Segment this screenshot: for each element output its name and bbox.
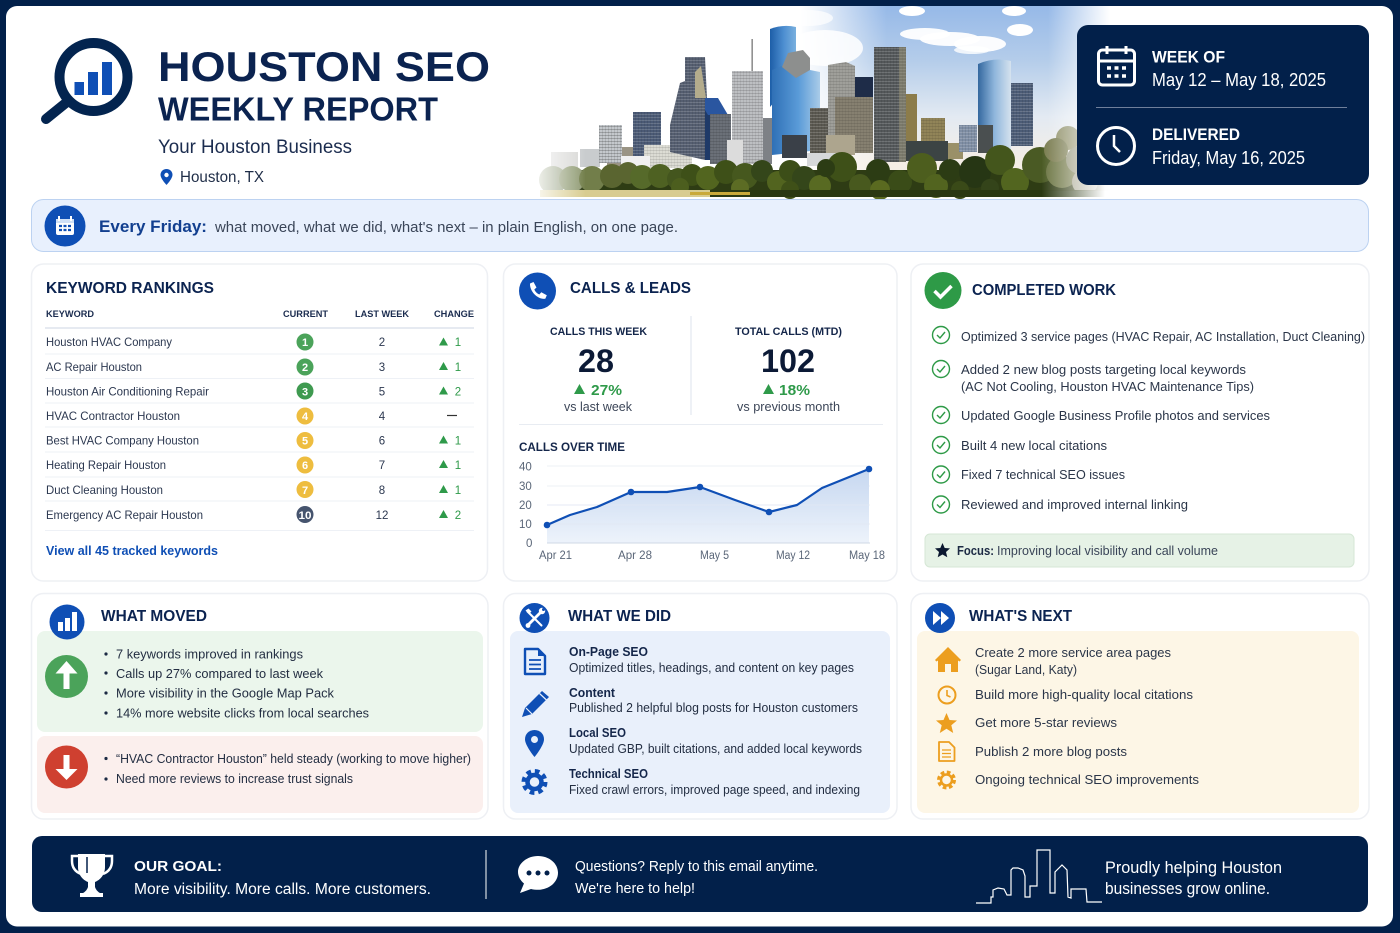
item: blog posts: Publish 2 more blog posts bbox=[975, 744, 1127, 759]
icon: down arrow bbox=[45, 746, 88, 788]
item: content bbox=[522, 686, 858, 717]
yellow block bbox=[917, 631, 1359, 813]
item: technical seo bbox=[524, 767, 860, 797]
stat: total calls: vs previous month bbox=[737, 400, 840, 414]
icon: phone bbox=[519, 272, 556, 310]
contact text: We're here to help! bbox=[575, 881, 695, 897]
icon: up arrow bbox=[45, 655, 88, 698]
callout: focus: Focus: bbox=[957, 544, 994, 558]
line chart: calls over time: 20 bbox=[519, 500, 532, 512]
stat: calls this week: 27% bbox=[591, 382, 622, 399]
stat: calls this week: CALLS THIS WEEK bbox=[550, 326, 647, 338]
icon: green check badge bbox=[924, 272, 962, 309]
row 6: 6 bbox=[302, 460, 308, 472]
row 1: 1 bbox=[302, 337, 308, 349]
list: improvements: 14% more website clicks from local searches bbox=[116, 706, 369, 720]
date card bbox=[1077, 25, 1369, 185]
title bbox=[158, 43, 490, 128]
row 5: 6 bbox=[379, 436, 385, 448]
row 7: 1 bbox=[455, 485, 461, 497]
item: reviews bbox=[936, 713, 1118, 733]
item: service pages: (Sugar Land, Katy) bbox=[975, 662, 1077, 677]
row 8: 12 bbox=[376, 510, 388, 522]
stat: total calls: 102 bbox=[761, 343, 815, 379]
row 8: Emergency AC Repair Houston bbox=[46, 508, 203, 522]
row 7 bbox=[46, 481, 461, 498]
line chart: calls over time: May 5 bbox=[700, 550, 729, 562]
row 6: 7 bbox=[379, 460, 385, 472]
location: Houston, TX bbox=[180, 169, 265, 186]
heading: KEYWORD RANKINGS bbox=[46, 280, 214, 297]
footer band bbox=[32, 836, 1368, 912]
task list: Added 2 new blog posts targeting local keywords bbox=[961, 362, 1246, 377]
item: local seo: Updated GBP, built citations, and added local keywords bbox=[569, 742, 862, 756]
row 1 bbox=[46, 334, 461, 350]
chart title: CALLS OVER TIME bbox=[519, 442, 625, 454]
list: watch items: Need more reviews to increase trust signals bbox=[116, 772, 353, 786]
line chart: calls over time: 0 bbox=[526, 538, 532, 550]
row 6 bbox=[46, 456, 461, 474]
item: content: Content bbox=[569, 686, 616, 700]
list: improvements bbox=[104, 648, 369, 720]
goal text: OUR GOAL: bbox=[134, 859, 222, 875]
trees bbox=[539, 126, 1105, 200]
icon: magnifier logo bbox=[46, 43, 128, 119]
row 5: Best HVAC Company Houston bbox=[46, 434, 199, 448]
tagline: businesses grow online. bbox=[1105, 880, 1270, 898]
task list: Reviewed and improved internal linking bbox=[961, 497, 1188, 512]
green block bbox=[37, 631, 483, 732]
row 5: 1 bbox=[455, 436, 461, 448]
task list: Updated Google Business Profile photos and services bbox=[961, 408, 1270, 423]
row 6: Heating Repair Houston bbox=[46, 458, 166, 472]
row 2: 1 bbox=[455, 362, 461, 374]
line chart: calls over time: 40 bbox=[519, 462, 532, 474]
line chart: calls over time: Apr 21 bbox=[539, 550, 572, 562]
row 2: AC Repair Houston bbox=[46, 360, 142, 374]
stat: calls this week bbox=[550, 326, 647, 414]
line chart: calls over time bbox=[519, 462, 885, 562]
business name: Your Houston Business bbox=[158, 136, 352, 158]
row 4 bbox=[46, 408, 457, 424]
goal text bbox=[134, 859, 431, 898]
list: improvements: More visibility in the Google Map Pack bbox=[116, 686, 335, 700]
row 3: 5 bbox=[379, 386, 385, 398]
stat: calls this week: vs last week bbox=[564, 400, 633, 414]
row 1: Houston HVAC Company bbox=[46, 335, 172, 349]
row 2: 3 bbox=[379, 362, 385, 374]
task list: Built 4 new local citations bbox=[961, 438, 1107, 453]
table header bbox=[46, 309, 474, 320]
item: on-page seo: Optimized titles, headings, and content on key pages bbox=[569, 661, 854, 675]
list: improvements: Calls up 27% compared to last week bbox=[116, 667, 324, 681]
title: WEEKLY REPORT bbox=[158, 92, 439, 128]
row 4: HVAC Contractor Houston bbox=[46, 409, 180, 423]
row 3 bbox=[46, 382, 461, 400]
item: citations: Build more high-quality local citations bbox=[975, 687, 1194, 702]
item: service pages: Create 2 more service area pages bbox=[975, 645, 1171, 660]
line chart: calls over time: 30 bbox=[519, 481, 532, 493]
item: technical seo: Technical SEO bbox=[569, 767, 648, 781]
row 4: 4 bbox=[379, 411, 386, 423]
item: local seo: Local SEO bbox=[569, 726, 626, 740]
task list: Fixed 7 technical SEO issues bbox=[961, 467, 1125, 482]
week of: May 12 – May 18, 2025 bbox=[1152, 70, 1326, 90]
list: watch items: “HVAC Contractor Houston” held steady (working to move higher) bbox=[116, 752, 471, 766]
stat: total calls: TOTAL CALLS (MTD) bbox=[735, 326, 842, 338]
goal text: More visibility. More calls. More customers. bbox=[134, 881, 431, 898]
heading: WHAT MOVED bbox=[101, 608, 207, 625]
task list: Optimized 3 service pages (HVAC Repair, AC Installation, Duct Cleaning) bbox=[961, 329, 1365, 344]
tagline bbox=[1105, 859, 1282, 898]
tagline: Proudly helping Houston bbox=[1105, 859, 1282, 877]
line chart: calls over time: 10 bbox=[519, 519, 532, 531]
banner bbox=[32, 200, 1368, 252]
callout: focus bbox=[925, 534, 1354, 567]
icon: forward badge bbox=[925, 603, 955, 633]
item: on-page seo bbox=[525, 645, 854, 675]
week of: WEEK OF bbox=[1152, 48, 1225, 66]
delivered: Friday, May 16, 2025 bbox=[1152, 148, 1305, 168]
banner text: what moved, what we did, what's next – in plain English, on one page. bbox=[214, 219, 678, 236]
item: reviews: Get more 5-star reviews bbox=[975, 715, 1118, 730]
row 4: 4 bbox=[302, 411, 309, 423]
item: blog posts bbox=[939, 742, 1127, 761]
row 1: 2 bbox=[379, 337, 385, 349]
icon: trophy bbox=[72, 854, 112, 897]
row 7: 7 bbox=[302, 485, 308, 497]
item: content: Published 2 helpful blog posts for Houston customers bbox=[569, 701, 858, 715]
row 3: 3 bbox=[302, 386, 308, 398]
icon: bars badge bbox=[50, 604, 84, 640]
panel: calls and leads bbox=[504, 264, 897, 581]
panel: what we did bbox=[504, 594, 897, 819]
table header: CHANGE bbox=[434, 309, 474, 320]
icon: clock bbox=[1098, 128, 1134, 164]
table header: LAST WEEK bbox=[355, 309, 409, 320]
panel: what moved bbox=[32, 594, 488, 819]
row 2 bbox=[46, 358, 461, 376]
table header: KEYWORD bbox=[46, 309, 94, 320]
heading: WHAT WE DID bbox=[568, 608, 671, 625]
row 5 bbox=[46, 432, 461, 449]
line chart: calls over time: May 18 bbox=[849, 550, 885, 562]
heading: CALLS & LEADS bbox=[570, 280, 691, 297]
row 1: 1 bbox=[455, 337, 461, 349]
delivered bbox=[1152, 126, 1305, 168]
stat: total calls bbox=[735, 326, 842, 414]
week of bbox=[1152, 48, 1326, 90]
item: on-page seo: On-Page SEO bbox=[569, 645, 648, 659]
icon: chat bubble bbox=[518, 856, 558, 893]
panel: completed work bbox=[911, 264, 1369, 581]
item: technical improvements: Ongoing technical SEO improvements bbox=[975, 772, 1200, 787]
line chart: calls over time: May 12 bbox=[776, 550, 810, 562]
callout: focus: Improving local visibility and call volume bbox=[997, 544, 1218, 558]
red block bbox=[37, 736, 483, 813]
icon: calendar badge bbox=[44, 206, 86, 246]
list: improvements: 7 keywords improved in rankings bbox=[116, 648, 303, 662]
icon: skyline outline bbox=[976, 850, 1102, 903]
list: watch items bbox=[104, 752, 471, 786]
item: local seo bbox=[525, 726, 862, 757]
row 8 bbox=[46, 506, 461, 523]
row 2: 2 bbox=[302, 362, 308, 374]
banner text: Every Friday: bbox=[99, 217, 207, 236]
title: HOUSTON SEO bbox=[158, 43, 490, 90]
contact text bbox=[575, 859, 818, 897]
item: service pages bbox=[935, 645, 1171, 677]
line chart: calls over time: Apr 28 bbox=[618, 550, 652, 562]
row 7: 8 bbox=[379, 485, 385, 497]
row 7: Duct Cleaning Houston bbox=[46, 483, 163, 497]
link: view all keywords: View all 45 tracked keywords bbox=[46, 544, 218, 558]
contact text: Questions? Reply to this email anytime. bbox=[575, 859, 818, 875]
icon: calendar bbox=[1098, 46, 1134, 85]
item: technical seo: Fixed crawl errors, improved page speed, and indexing bbox=[569, 783, 860, 797]
stat: total calls: 18% bbox=[779, 382, 810, 399]
panel: keyword rankings bbox=[32, 264, 488, 581]
skyline illustration bbox=[539, 6, 1120, 200]
row 8: 2 bbox=[455, 510, 461, 522]
delivered: DELIVERED bbox=[1152, 126, 1240, 144]
row 3: 2 bbox=[455, 386, 461, 398]
row 3: Houston Air Conditioning Repair bbox=[46, 384, 209, 398]
blue block bbox=[510, 631, 890, 813]
row 5: 5 bbox=[302, 436, 308, 448]
row 6: 1 bbox=[455, 460, 461, 472]
heading: COMPLETED WORK bbox=[972, 282, 1116, 299]
stat: calls this week: 28 bbox=[578, 343, 614, 379]
table header: CURRENT bbox=[283, 309, 328, 320]
row 8: 10 bbox=[298, 510, 312, 522]
task list bbox=[932, 326, 1365, 513]
panel: what's next bbox=[911, 594, 1369, 819]
heading: WHAT'S NEXT bbox=[969, 608, 1072, 625]
task list: (AC Not Cooling, Houston HVAC Maintenance Tips) bbox=[961, 379, 1254, 394]
icon: tools badge bbox=[520, 603, 550, 633]
